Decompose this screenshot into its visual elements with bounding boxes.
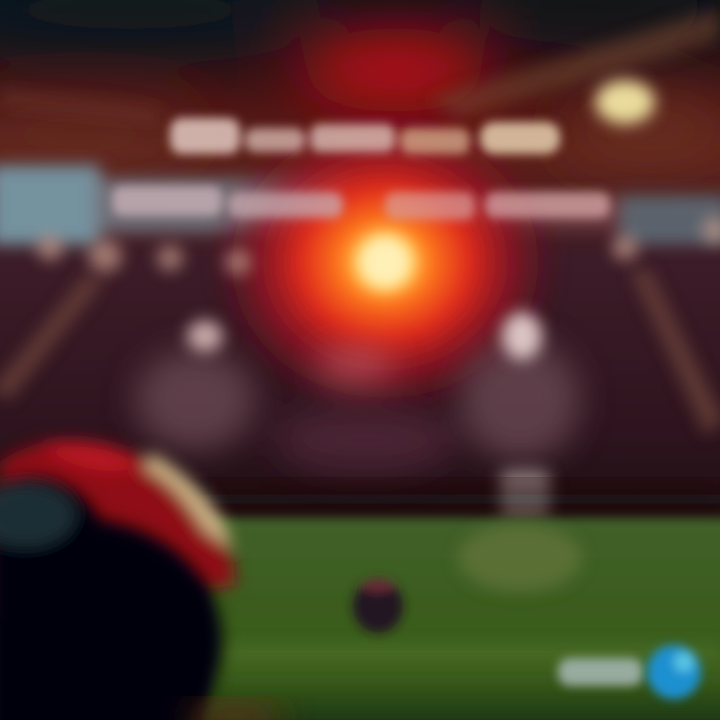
logo: blue circle	[647, 645, 701, 699]
roof beam	[0, 8, 720, 122]
diagonal stand supports	[0, 270, 720, 435]
pitch	[205, 518, 720, 720]
pale blue band of stands	[0, 165, 720, 245]
foreground: spectator with red cap	[0, 440, 235, 720]
ball on pitch	[353, 579, 403, 633]
logo: blurred wordmark	[558, 658, 643, 686]
pale crowd shapes	[135, 340, 580, 475]
pitch circle glow	[220, 524, 720, 659]
cap: red dome	[0, 440, 235, 620]
head: dark silhouette	[0, 478, 222, 720]
dark base of stands	[200, 488, 720, 510]
upper red glow	[0, 0, 720, 160]
central sun glow	[210, 107, 560, 417]
row of small lights	[37, 217, 720, 275]
bottom warm glow	[185, 706, 285, 720]
core of the light	[359, 236, 411, 288]
small white spots	[187, 312, 550, 518]
heading line two: blurred text	[112, 186, 610, 220]
floodlight: upper right	[595, 80, 655, 124]
heading line one: blurred text	[170, 118, 560, 154]
